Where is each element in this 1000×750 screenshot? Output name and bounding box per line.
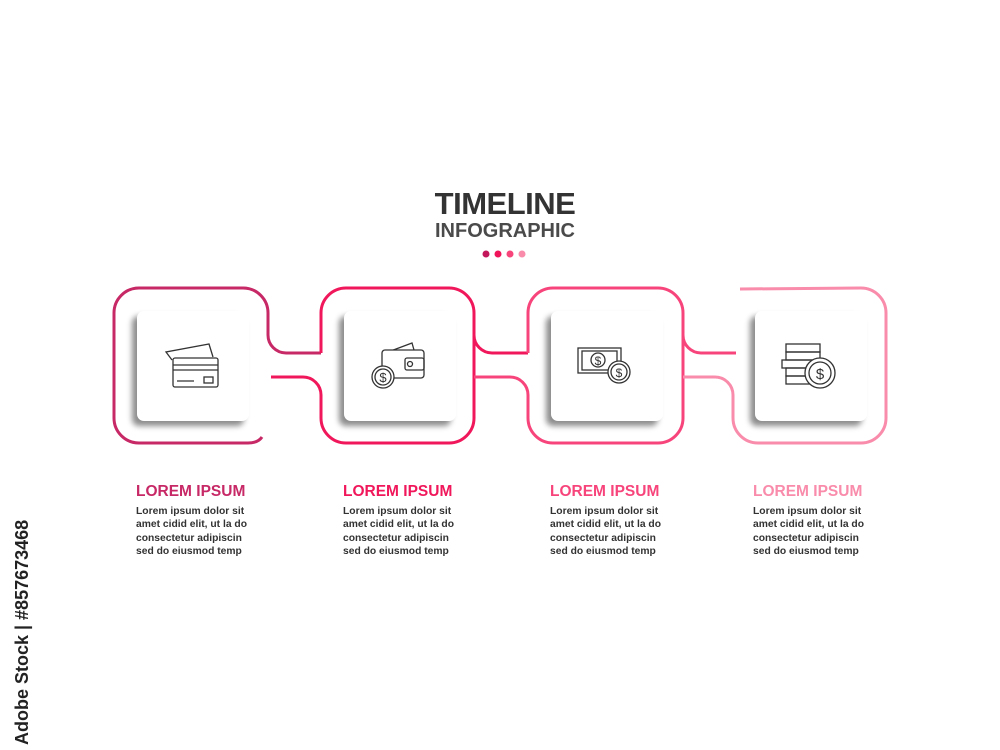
- text: step 1: [136, 483, 247, 557]
- text: step 2: [343, 483, 454, 557]
- text: sed do eiusmod temp: [343, 546, 449, 557]
- text: sed do eiusmod temp: [753, 546, 859, 557]
- text: consectetur adipiscin: [753, 533, 859, 544]
- title: [434, 186, 575, 242]
- text: LOREM IPSUM: [550, 483, 659, 500]
- text: step 3: [550, 483, 661, 557]
- icon: banknote: $: [616, 366, 623, 380]
- title: TIMELINE: [435, 186, 575, 221]
- title: INFOGRAPHIC: [435, 220, 575, 242]
- text: sed do eiusmod temp: [550, 546, 656, 557]
- text: consectetur adipiscin: [343, 533, 449, 544]
- text: amet cidid elit, ut la do: [136, 519, 247, 530]
- text: LOREM IPSUM: [753, 483, 862, 500]
- panel: step 2 card: [344, 311, 456, 421]
- text: Lorem ipsum dolor sit: [343, 506, 451, 517]
- text: LOREM IPSUM: [136, 483, 245, 500]
- text: Lorem ipsum dolor sit: [550, 506, 658, 517]
- text: Lorem ipsum dolor sit: [753, 506, 861, 517]
- text: sed do eiusmod temp: [136, 546, 242, 557]
- text: step 4: [753, 483, 864, 557]
- text: Lorem ipsum dolor sit: [136, 506, 244, 517]
- dots: [482, 250, 526, 258]
- icon: coins: $: [816, 366, 825, 383]
- text: amet cidid elit, ut la do: [343, 519, 454, 530]
- icon: coins: [782, 344, 835, 388]
- icon: wallet: [372, 343, 424, 388]
- watermark id: Adobe Stock | #857673468: [12, 520, 32, 745]
- icon: banknote: $: [595, 354, 602, 368]
- panel: step 3 card: [551, 311, 663, 421]
- text: amet cidid elit, ut la do: [550, 519, 661, 530]
- icon: wallet: $: [379, 370, 387, 385]
- panel: step 4 card: [755, 311, 867, 421]
- panel: step 1 card: [137, 311, 249, 421]
- icon: credit cards: [166, 344, 218, 387]
- icon: banknote: [578, 348, 630, 383]
- text: amet cidid elit, ut la do: [753, 519, 864, 530]
- text: consectetur adipiscin: [136, 533, 242, 544]
- text: consectetur adipiscin: [550, 533, 656, 544]
- text: LOREM IPSUM: [343, 483, 452, 500]
